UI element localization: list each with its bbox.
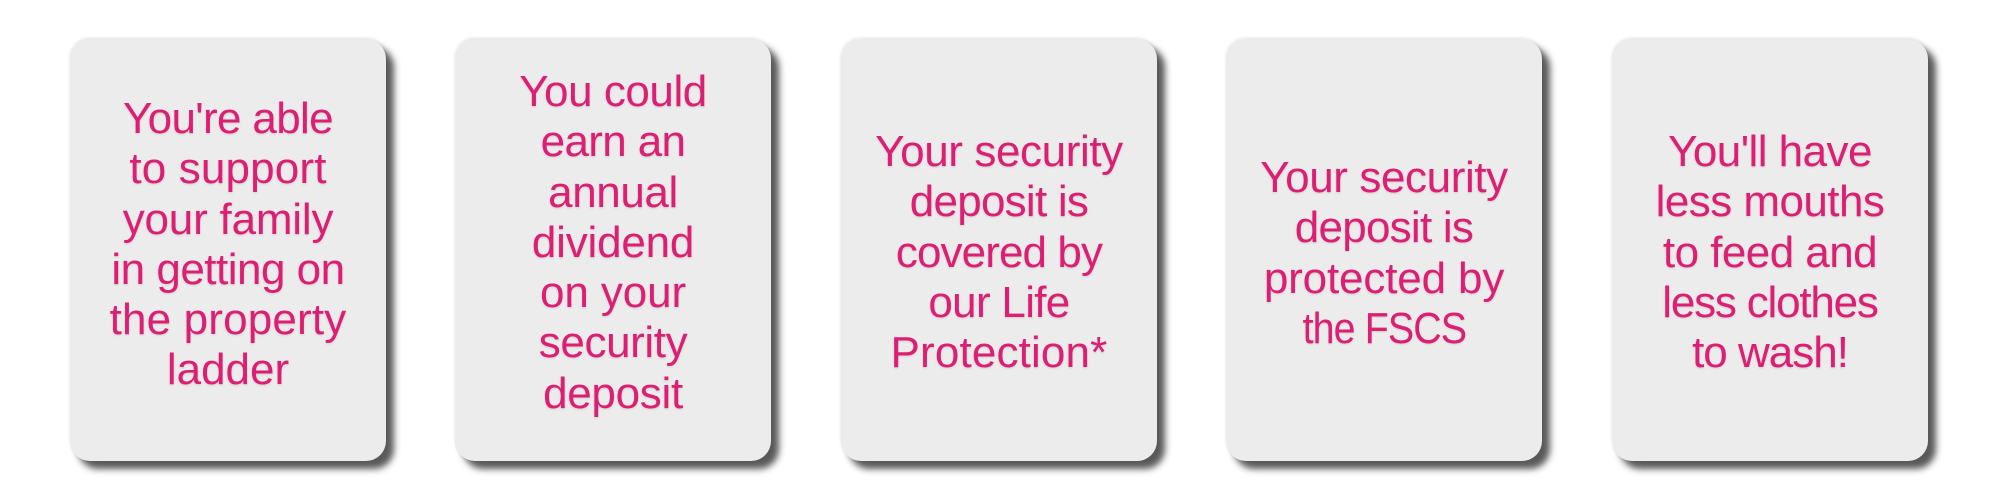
text: annual dividend: earn an xyxy=(541,117,685,166)
text: fewer mouths to feed: less mouths xyxy=(1656,177,1884,226)
text: annual dividend: deposit xyxy=(543,369,683,418)
text: annual dividend xyxy=(519,67,707,418)
text: support your family: ladder xyxy=(167,345,289,394)
text: life protection: deposit is xyxy=(910,177,1088,226)
text: fewer mouths to feed: less clothes xyxy=(1662,278,1878,327)
text: support your family: the property xyxy=(110,295,346,344)
text: fewer mouths to feed: You'll have xyxy=(1668,127,1872,176)
text: support your family: your family xyxy=(123,195,333,244)
text: life protection: Protection* xyxy=(891,328,1107,377)
text: annual dividend: security xyxy=(539,318,687,367)
text: fewer mouths to feed: to wash! xyxy=(1692,328,1848,377)
text: fewer mouths to feed: to feed and xyxy=(1663,228,1877,277)
text: FSCS protection: deposit is xyxy=(1295,203,1473,252)
text: life protection: covered by xyxy=(896,228,1102,277)
text: life protection xyxy=(875,127,1123,377)
text: FSCS protection xyxy=(1260,153,1508,353)
panel: card 1 xyxy=(70,39,386,461)
panel: card 4 xyxy=(1226,39,1542,461)
text: support your family: in getting on xyxy=(111,245,345,294)
text: annual dividend: annual xyxy=(548,168,678,217)
text: support your family: You're able xyxy=(123,94,333,143)
text: annual dividend: dividend xyxy=(532,218,694,267)
text: annual dividend: on your xyxy=(540,268,686,317)
text: life protection: Your security xyxy=(875,127,1123,176)
text: annual dividend: You could xyxy=(519,67,707,116)
text: FSCS protection: protected by xyxy=(1264,254,1504,303)
text: fewer mouths to feed xyxy=(1656,127,1884,377)
panel: card 3 xyxy=(841,39,1157,461)
panel: card 2 xyxy=(455,39,771,461)
text: life protection: our Life xyxy=(928,278,1070,327)
text: support your family xyxy=(110,94,346,394)
panel: card 5 xyxy=(1612,39,1928,461)
text: FSCS protection: Your security xyxy=(1260,153,1508,202)
text: support your family: to support xyxy=(129,144,327,193)
text: FSCS protection: the FSCS xyxy=(1302,304,1466,353)
